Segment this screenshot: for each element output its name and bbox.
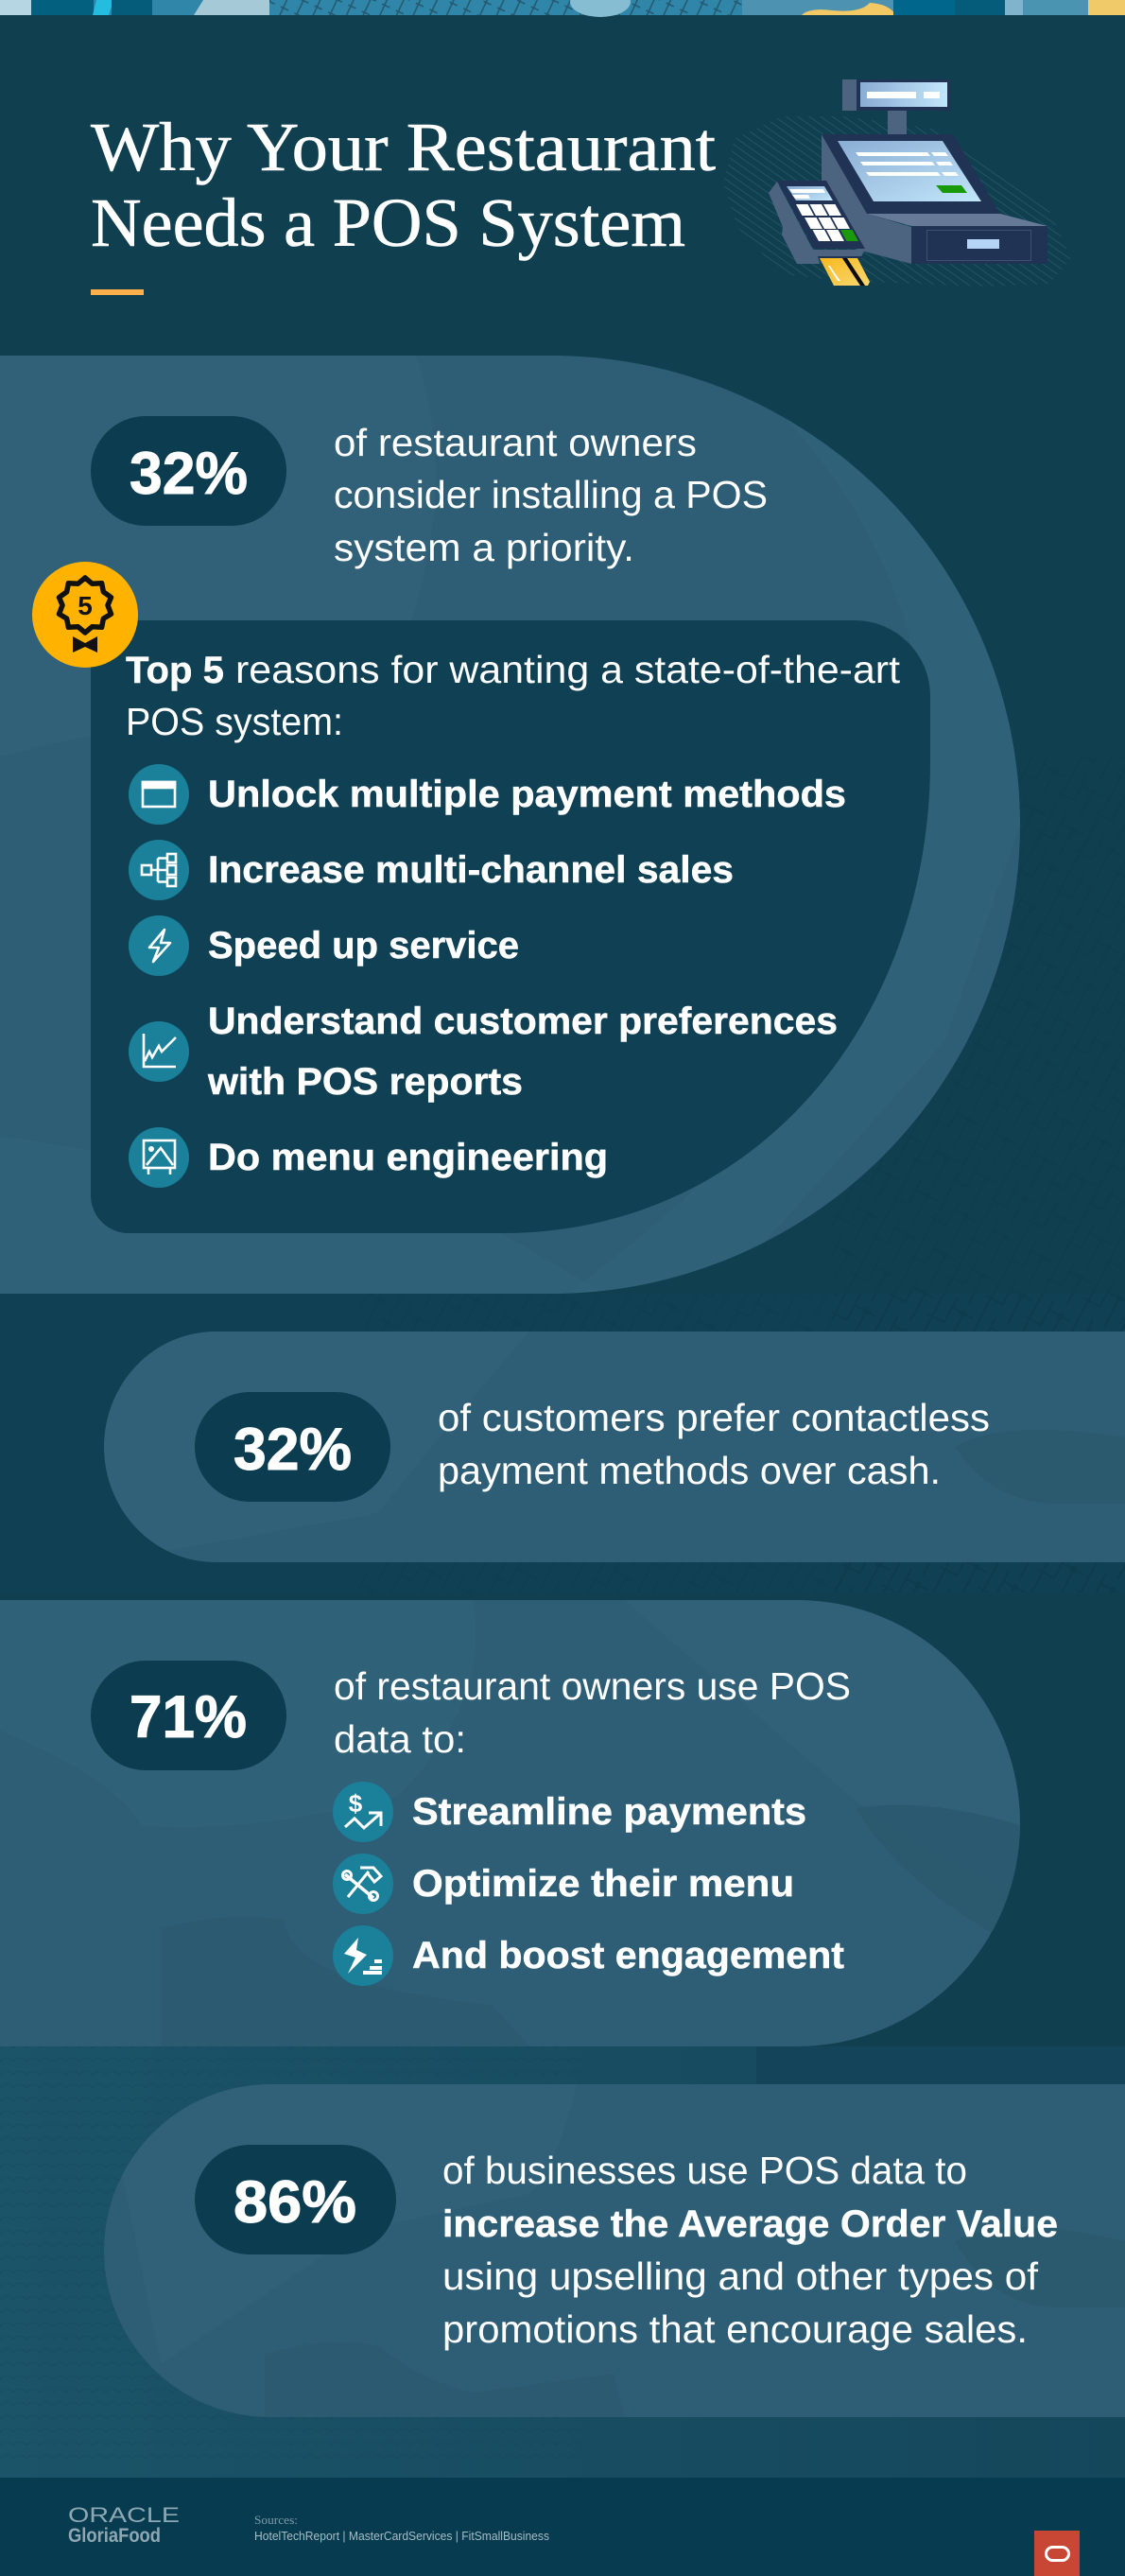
list item: optimize menu: Optimize their menu <box>412 1863 794 1905</box>
panel texture <box>371 1901 376 1902</box>
text: average order value <box>442 2149 1058 2351</box>
text: average order value: increase the Average Order Value <box>442 2203 1058 2245</box>
list item: streamline payments <box>333 1782 806 1842</box>
logo: Oracle GloriaFood: ORACLE <box>68 2503 180 2527</box>
list item: multi-channel sales: Increase multi-channel sales <box>208 849 734 891</box>
stat pill: 32%: 32% <box>130 441 248 507</box>
list item: optimize menu <box>333 1854 794 1914</box>
panel: 86% of businesses <box>104 2084 1125 2417</box>
list item: payment methods <box>129 764 846 825</box>
panel: 32% of restaurant owners <box>0 356 1020 1294</box>
panel: top 5 reasons <box>91 620 930 1233</box>
list item: speed up service <box>129 915 519 976</box>
heading: top 5 reasons: Top 5 <box>126 650 224 691</box>
title <box>91 109 716 261</box>
panel: 71% use POS data <box>0 1600 1020 2046</box>
list item: menu engineering <box>129 1127 608 1188</box>
list item: boost engagement: And boost engagement <box>412 1935 844 1976</box>
panel texture <box>0 356 1020 1294</box>
icon: top 5 award badge <box>32 562 138 668</box>
text: restaurant owners priority: system a priority. <box>334 526 634 569</box>
heading: top 5 reasons: POS system: <box>126 700 343 743</box>
icon: top 5 award badge: 5 <box>78 591 93 620</box>
sources: HotelTechReport | MasterCardServices | FitSmallBusiness <box>254 2529 549 2543</box>
text: average order value: using upselling and other types of <box>442 2254 1039 2298</box>
text: owners use POS data: data to: <box>334 1717 466 1761</box>
text: contactless preference: payment methods over cash. <box>438 1449 941 1492</box>
logo: Oracle GloriaFood <box>68 2503 180 2547</box>
stat pill: 71% <box>91 1661 286 1770</box>
sources: Sources: <box>254 2513 298 2527</box>
text: restaurant owners priority: of restaurant owners <box>334 421 697 464</box>
text: average order value: of businesses use POS data to <box>442 2149 967 2192</box>
list item: customer preferences: with POS reports <box>207 1061 523 1103</box>
title accent bar <box>91 289 144 295</box>
list item: payment methods: Unlock multiple payment methods <box>208 774 846 815</box>
footer <box>0 2478 1125 2576</box>
list item: customer preferences <box>129 1001 838 1103</box>
text: contactless preference: of customers prefer contactless <box>438 1396 990 1439</box>
stat pill: 32% <box>91 416 286 526</box>
text: average order value: promotions that encourage sales. <box>442 2307 1028 2351</box>
list item: menu engineering: Do menu engineering <box>208 1137 608 1178</box>
list item: streamline payments: Streamline payments <box>412 1791 806 1833</box>
list item: boost engagement <box>333 1925 844 1986</box>
text: contactless preference <box>438 1396 990 1492</box>
panel texture <box>341 1871 1015 1880</box>
list item: customer preferences: Understand customer preferences <box>208 1001 838 1042</box>
list item: streamline payments: $ <box>349 1789 363 1818</box>
stat pill: 71%: 71% <box>130 1684 247 1750</box>
text: owners use POS data: of restaurant owners use POS <box>334 1664 851 1708</box>
text: restaurant owners priority <box>334 421 768 569</box>
text: restaurant owners priority: consider installing a POS <box>334 473 768 516</box>
stat pill: 32%: 32% <box>234 1417 352 1483</box>
heading: top 5 reasons <box>126 648 901 743</box>
logo: Oracle GloriaFood: GloriaFood <box>68 2525 161 2547</box>
stat pill: 86%: 86% <box>234 2169 356 2236</box>
decorative illustrated top strip <box>0 0 1125 17</box>
text: owners use POS data <box>334 1664 851 1761</box>
panel texture <box>104 2084 1125 2417</box>
title: Needs a POS System <box>91 184 685 261</box>
list item: speed up service: Speed up service <box>208 925 519 966</box>
title: Why Your Restaurant <box>91 109 716 185</box>
panel: 32% of customers <box>104 1332 1125 1562</box>
stat pill: 32% <box>195 1392 390 1502</box>
icon: POS terminal illustration <box>723 79 1071 287</box>
sources <box>254 2513 549 2543</box>
logo: Oracle red tab <box>1034 2531 1080 2576</box>
list item: multi-channel sales <box>129 840 734 900</box>
stat pill: 86% <box>195 2145 396 2254</box>
heading: top 5 reasons: reasons for wanting a state-of-the-art <box>235 648 901 691</box>
